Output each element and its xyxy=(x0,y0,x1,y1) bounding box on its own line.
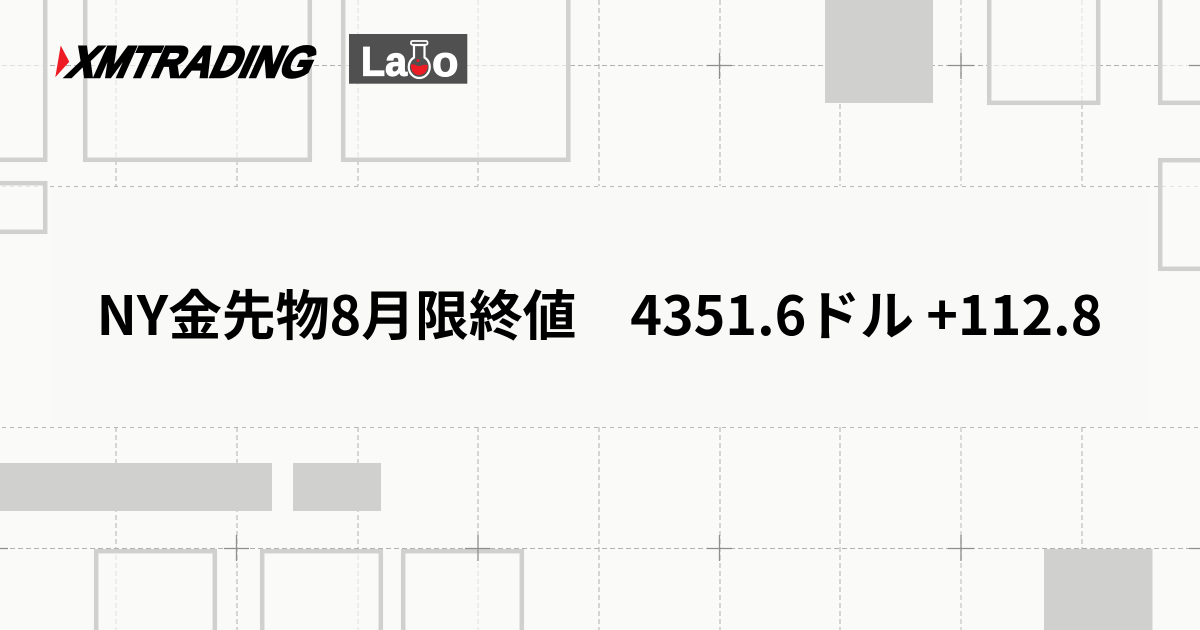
wordmark letter o: o xyxy=(432,38,458,86)
wordmark: La xyxy=(361,38,408,84)
panel: outlined squares bottom xyxy=(96,551,522,630)
wordmark: XMTRADING xyxy=(61,37,326,87)
icon: red arrow xyxy=(55,46,69,77)
panel: outlined squares top and side xyxy=(0,0,1200,269)
logo: Labo xyxy=(349,34,467,86)
logo: XMTRADING xyxy=(55,37,326,87)
icon: flask xyxy=(409,41,430,78)
title: NY金先物8月限終値 4351.6ドル +112.8 xyxy=(97,274,1102,351)
